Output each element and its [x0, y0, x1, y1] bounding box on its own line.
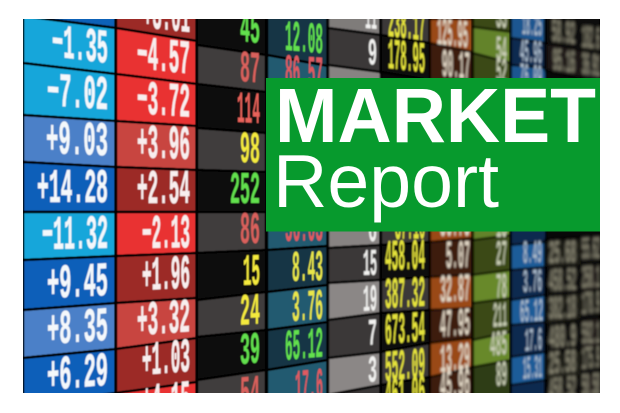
ticker board photo: 86 [240, 206, 260, 257]
column: orange price values [430, 0, 473, 413]
ticker board photo: 178.95 [388, 32, 425, 86]
ticker board photo: +9.45 [47, 256, 108, 313]
ticker board photo: 32.87 [440, 268, 470, 315]
ticker board photo: 54 [496, 30, 507, 72]
heading: MARKET: MARKET [275, 73, 596, 159]
ticker board photo: 37.16 [395, 202, 425, 253]
ticker board photo: 3.76 [523, 264, 542, 302]
column: blurred far-right values [546, 0, 600, 413]
ticker board photo: 65.12 [520, 292, 543, 332]
ticker board photo: 5.07 [446, 235, 470, 281]
ticker board photo: +2.54 [137, 164, 190, 218]
column: navy price values [511, 0, 546, 413]
ticker board photo: −1.35 [52, 17, 108, 78]
ticker board photo: 211 [493, 296, 507, 338]
ticker board photo: −3.72 [137, 74, 190, 132]
ticker board photo: 114 [237, 85, 260, 137]
column: white quantity values: 3 [368, 350, 377, 394]
column: white quantity values: 9 [368, 33, 377, 77]
ticker board photo: 19 [363, 279, 377, 323]
ticker board photo: 76.09 [520, 57, 542, 97]
column: red change values [116, 0, 197, 413]
ticker board photo: 45.96 [440, 363, 470, 411]
column: white quantity values [328, 0, 381, 413]
column: white quantity values: 7 [368, 313, 377, 357]
ticker board photo: 98 [240, 125, 260, 177]
ticker board photo: 673.54 [385, 305, 425, 358]
ticker board photo: 15 [243, 247, 260, 299]
ticker board photo: +3.32 [137, 292, 190, 350]
ticker board photo: 56.75 [440, 203, 470, 249]
ticker board photo: −2.13 [142, 208, 190, 263]
ticker board photo: 90.17 [442, 44, 470, 92]
ticker board photo: 24 [240, 286, 260, 339]
ticker board photo: +1.03 [142, 332, 190, 390]
ticker board photo: 15.31 [523, 349, 542, 389]
ticker board photo: +3.96 [137, 118, 190, 174]
ticker board photo: −7.02 [47, 66, 108, 124]
ticker board photo: 45 [240, 3, 260, 57]
ticker board photo: 87 [240, 43, 260, 97]
ticker board photo: −11.32 [42, 209, 108, 264]
heading: Report: Report [273, 139, 499, 223]
ticker board photo: 18.25 [522, 6, 542, 46]
ticker board photo: 13.29 [440, 337, 470, 385]
column: white quantity values: 6 [368, 210, 377, 253]
ticker board photo: 252 [230, 166, 260, 217]
ticker board photo: +9.03 [46, 114, 108, 170]
ticker board photo: 552.09 [385, 341, 425, 395]
ticker board photo: 56.03 [285, 204, 323, 255]
ticker board photo: 485 [490, 324, 507, 367]
ticker board photo: 387.32 [385, 270, 425, 322]
ticker board photo: 13 [496, 207, 507, 248]
ticker board photo: +14.28 [37, 163, 108, 217]
ticker board photo: 86.57 [285, 48, 323, 101]
column: olive quantity values [473, 0, 511, 413]
ticker board photo: 39 [240, 324, 260, 378]
ticker board photo: 17.6 [295, 362, 323, 413]
column: yellow price values [381, 0, 430, 413]
ticker board photo: +1.96 [142, 249, 190, 305]
ticker board photo: 15 [363, 244, 377, 287]
ticker board photo: 17.6 [525, 322, 542, 361]
banner: market report [266, 73, 600, 232]
ticker board photo: 45.96 [520, 33, 542, 73]
ticker board photo: 3.76 [292, 283, 323, 335]
ticker board photo: 458.04 [385, 233, 425, 284]
ticker board photo: 8.43 [292, 244, 323, 295]
ticker board photo: 89 [496, 355, 507, 397]
column: blue change values [23, 0, 116, 405]
ticker board photo: +8.35 [47, 301, 108, 359]
column: teal price values [267, 19, 328, 393]
ticker board photo: 47.95 [440, 302, 470, 350]
column: volume values [197, 0, 266, 413]
ticker board photo: +6.29 [47, 346, 108, 405]
ticker board photo: 8.49 [523, 235, 542, 273]
ticker board photo: 125.95 [437, 12, 468, 61]
ticker board photo: 12.08 [285, 14, 323, 67]
ticker board photo: −4.57 [137, 29, 190, 89]
ticker board photo: 238.17 [388, 0, 425, 54]
ticker board photo: 52 [496, 52, 507, 94]
ticker board photo: 65.12 [285, 321, 323, 374]
ticker board photo: 27 [496, 234, 507, 276]
ticker board photo: 78 [496, 267, 507, 309]
